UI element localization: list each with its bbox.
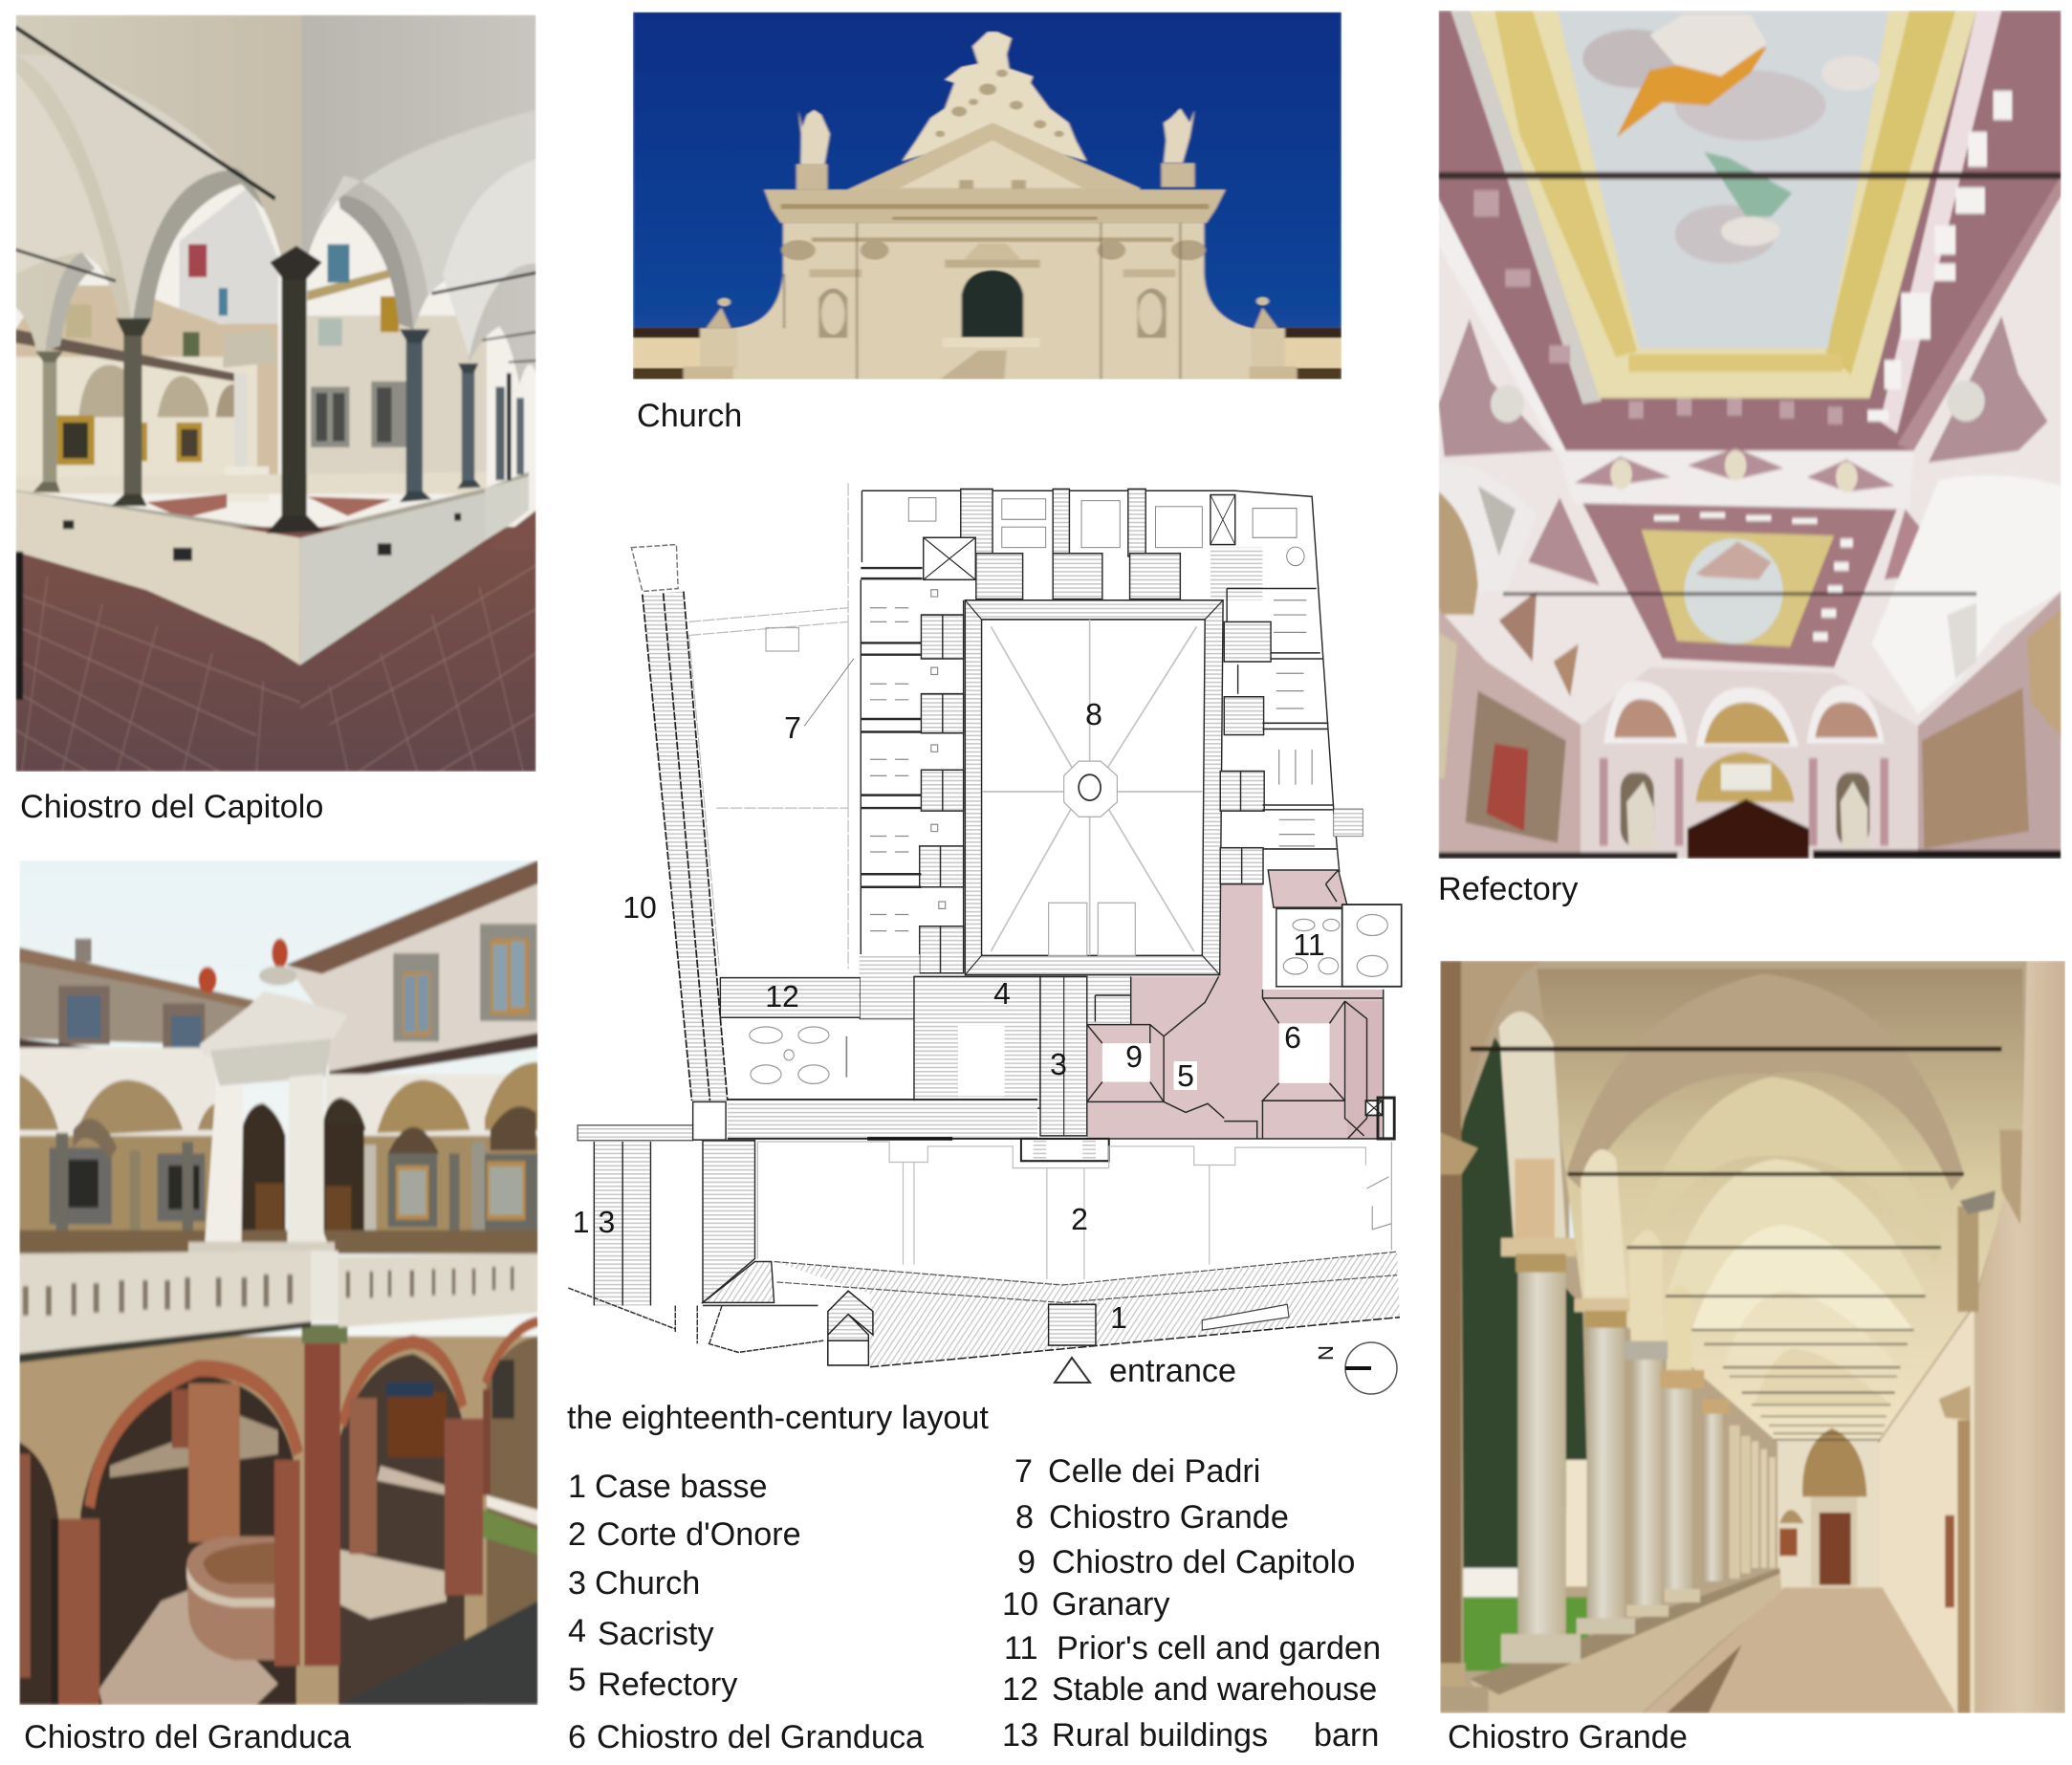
legend: items 7 to 13: 11 <box>1004 1630 1038 1667</box>
photo: Chiostro del Granduca <box>19 861 537 1705</box>
plan number labels: 1 3 <box>573 1205 615 1239</box>
plan number labels <box>573 697 1325 1335</box>
legend: items 7 to 13: Granary <box>1052 1586 1170 1623</box>
legend: items 1 to 6: 3 <box>568 1565 586 1602</box>
plan number labels: 10 <box>622 890 657 925</box>
floor plan <box>568 483 1402 1367</box>
legend: items 1 to 6: Case basse <box>595 1469 768 1505</box>
legend: items 1 to 6: 2 <box>568 1516 586 1553</box>
side statues <box>796 108 1194 189</box>
pink refectory area <box>1087 870 1394 1139</box>
legend: items 7 to 13: 10 <box>1002 1586 1038 1623</box>
legend: items 7 to 13: Rural buildings <box>1052 1717 1268 1754</box>
columns <box>33 246 524 534</box>
plan number labels: 5 <box>1177 1058 1194 1093</box>
legend: items 1 to 6: Church <box>595 1565 700 1602</box>
legend: items 7 to 13: Stable and warehouse <box>1052 1671 1377 1708</box>
legend: items 1 to 6: Refectory <box>598 1667 738 1703</box>
aedicule <box>188 967 348 1254</box>
right cells <box>1220 589 1337 884</box>
photo: Refectory <box>1439 11 2061 859</box>
legend: items 7 to 13: Celle dei Padri <box>1048 1453 1260 1490</box>
legend: items 1 to 6: 6 <box>568 1719 586 1755</box>
stable, warehouse and garden <box>720 954 1040 1139</box>
Corte d'Onore <box>757 1142 1391 1279</box>
icon: north compass: N <box>1314 1345 1338 1361</box>
legend: items 7 to 13 <box>1002 1453 1381 1754</box>
diamond band <box>1558 447 1913 510</box>
walls with frescoes <box>1439 591 2061 859</box>
legend: items 7 to 13: barn <box>1314 1717 1379 1754</box>
legend: items 7 to 13: Chiostro Grande <box>1049 1499 1289 1536</box>
floor <box>1644 1587 1955 1713</box>
parapet <box>1470 1568 1781 1713</box>
photo: Church <box>633 12 1341 380</box>
photo: Chiostro del Capitolo <box>15 14 536 772</box>
plan number labels: 3 <box>1050 1047 1067 1081</box>
entrance marker: entrance <box>1109 1353 1236 1389</box>
legend: items 7 to 13: 13 <box>1002 1717 1038 1754</box>
end wall <box>1581 667 1918 859</box>
lower arcade <box>19 1336 537 1705</box>
top range <box>861 489 1340 872</box>
balustrade <box>19 1251 311 1360</box>
legend: items 7 to 13: Prior's cell and garden <box>1057 1630 1381 1667</box>
caption: Chiostro del Granduca: Chiostro del Granduca <box>24 1719 352 1755</box>
right wall <box>1878 1307 1974 1713</box>
plan number labels: 12 <box>765 979 799 1013</box>
far wall with door <box>1778 1428 1878 1589</box>
prior's cell and garden <box>1276 904 1402 987</box>
legend: items 1 to 6 <box>568 1469 925 1755</box>
caption: Refectory: Refectory <box>1438 871 1579 907</box>
legend: items 1 to 6: Chiostro del Granduca <box>597 1719 925 1755</box>
legend: items 7 to 13: 9 <box>1017 1544 1036 1580</box>
legend: items 7 to 13: Chiostro del Capitolo <box>1052 1544 1355 1580</box>
icon: north compass <box>1314 1342 1397 1394</box>
photo: Chiostro Grande <box>1440 961 2065 1713</box>
Chiostro Grande plan <box>965 600 1223 975</box>
tie rods <box>15 28 536 362</box>
legend: items 1 to 6: 1 <box>568 1469 586 1505</box>
cypress tree and lawn <box>1461 1037 1591 1671</box>
legend: items 7 to 13: 8 <box>1015 1499 1034 1536</box>
plan number labels: 7 <box>784 710 801 745</box>
plan number labels: 6 <box>1284 1020 1301 1055</box>
plan number labels: 1 <box>1110 1300 1127 1335</box>
caption: Church: Church <box>637 398 742 434</box>
rural buildings <box>568 1101 873 1365</box>
granary <box>631 545 728 1100</box>
layout heading: the eighteenth-century layout <box>567 1400 989 1436</box>
legend: items 1 to 6: Sacristy <box>598 1616 714 1652</box>
left cells <box>861 579 964 973</box>
legend: items 7 to 13: 12 <box>1002 1671 1038 1708</box>
caption: Chiostro del Capitolo: Chiostro del Capitolo <box>20 789 323 825</box>
pediment sculpture group <box>902 32 1086 161</box>
legend: items 1 to 6: 5 <box>568 1662 586 1698</box>
legend: items 1 to 6: 4 <box>568 1613 586 1649</box>
plan number labels: 11 <box>1293 927 1325 962</box>
church plan <box>1021 976 1109 1161</box>
columns <box>1440 1238 1776 1713</box>
plan number labels: 9 <box>1125 1039 1143 1074</box>
legend: items 1 to 6: Corte d'Onore <box>597 1516 801 1553</box>
Case basse band <box>774 1252 1400 1367</box>
tie rods <box>1471 1049 2001 1440</box>
plan number labels: 4 <box>993 976 1011 1011</box>
plan number labels: 2 <box>1071 1202 1088 1236</box>
plan number labels: 8 <box>1085 697 1102 731</box>
caption: Chiostro Grande: Chiostro Grande <box>1448 1719 1688 1755</box>
legend: items 7 to 13: 7 <box>1014 1453 1033 1490</box>
